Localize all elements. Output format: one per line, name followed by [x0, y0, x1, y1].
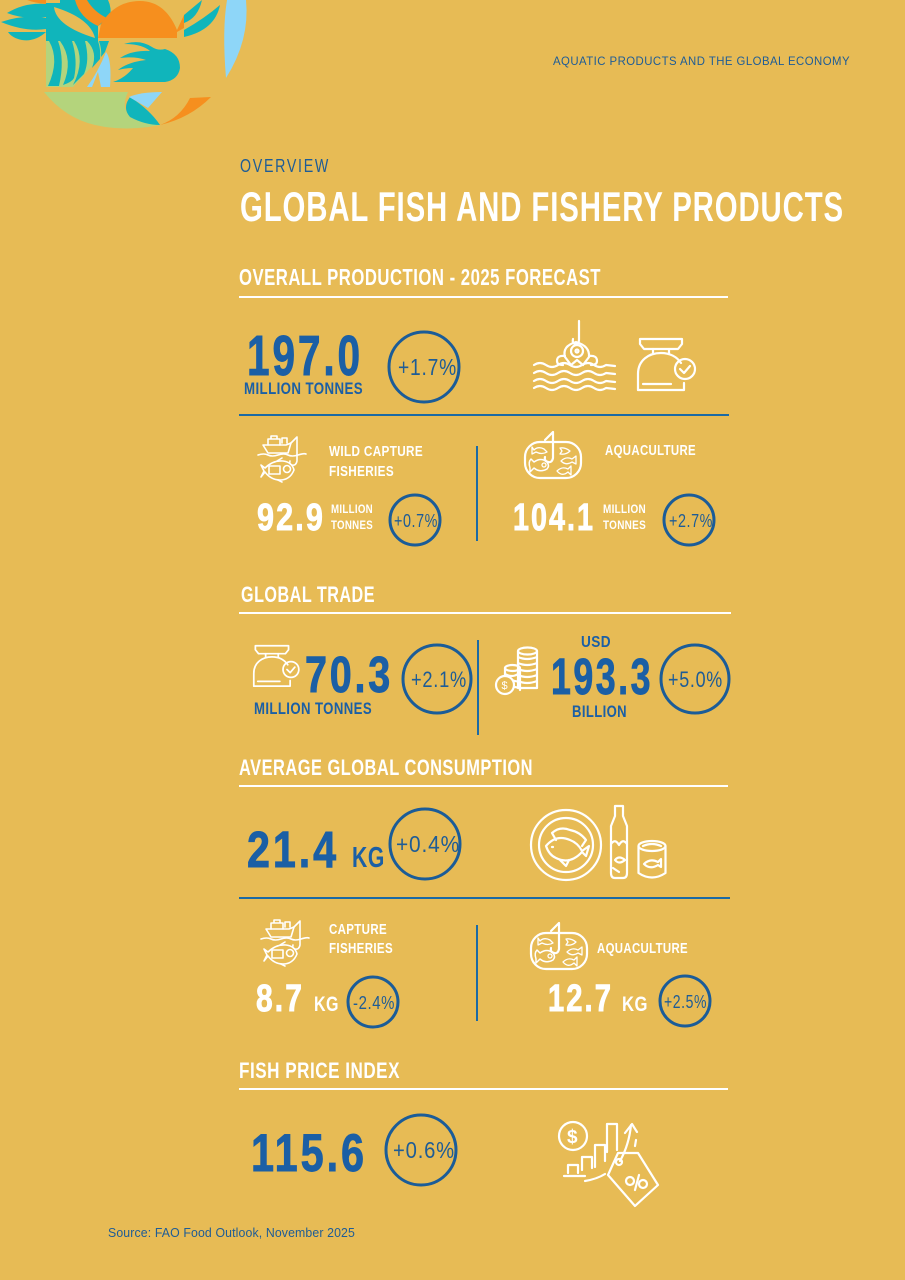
- price index change badge: [386, 1115, 456, 1185]
- icon: tin can: [638, 841, 666, 878]
- wild capture unit: TONNES: [331, 518, 373, 532]
- aquaculture unit: KG: [622, 993, 648, 1016]
- section heading: AVERAGE GLOBAL CONSUMPTION: [239, 755, 533, 780]
- decorative tropical illustration: [1, 0, 247, 128]
- aquaculture change badge: [664, 495, 714, 545]
- aquaculture unit: TONNES: [603, 518, 646, 532]
- aquaculture label: AQUACULTURE: [597, 941, 688, 957]
- price index change badge: +0.6%: [393, 1137, 455, 1163]
- aquaculture unit: MILLION: [603, 502, 646, 516]
- icon: capture fishing boat: [258, 436, 306, 482]
- capture unit: KG: [314, 993, 339, 1016]
- capture value: 8.7: [256, 978, 304, 1020]
- consumption value: 21.4: [247, 821, 339, 878]
- aquaculture value: 12.7: [548, 978, 613, 1020]
- section: fish price index: [239, 1058, 728, 1206]
- wild capture value: 92.9: [257, 497, 325, 539]
- total production figure: 197.0: [247, 324, 363, 388]
- wild capture change badge: +0.7%: [394, 511, 438, 531]
- trade volume value: 70.3: [305, 646, 393, 703]
- panel: production split: [257, 432, 714, 545]
- icon: capture fishing boat: [261, 920, 309, 966]
- icon: coins: $: [502, 680, 508, 692]
- icon: bottle: [611, 806, 627, 878]
- consumption change badge: +0.4%: [396, 831, 460, 857]
- consumption change badge: [390, 809, 460, 879]
- unit: MILLION TONNES: [244, 380, 363, 398]
- icon: aquaculture pond: [525, 432, 581, 478]
- icon: weighing scale: [638, 339, 695, 390]
- section: global trade: [239, 582, 731, 735]
- price index value: 115.6: [251, 1124, 367, 1183]
- icon: aquaculture pond: [531, 923, 587, 969]
- section: average global consumption: [239, 755, 730, 899]
- wild capture unit: [331, 502, 373, 532]
- running header: AQUATIC PRODUCTS AND THE GLOBAL ECONOMY: [553, 54, 850, 68]
- trade value change badge: [661, 645, 729, 713]
- panel: consumption split: [256, 920, 710, 1027]
- capture fisheries label: FISHERIES: [329, 941, 393, 957]
- capture fisheries label: CAPTURE: [329, 922, 387, 938]
- icon: coins: [496, 648, 537, 694]
- wild capture label: [329, 444, 423, 480]
- billion label: BILLION: [572, 702, 627, 721]
- change badge: [389, 332, 459, 402]
- trade volume change badge: +2.1%: [411, 667, 467, 692]
- aquaculture value: 104.1: [513, 497, 595, 539]
- trade value change badge: +5.0%: [668, 667, 723, 692]
- source note: Source: FAO Food Outlook, November 2025: [108, 1226, 355, 1240]
- aquaculture label: AQUACULTURE: [605, 443, 696, 459]
- USD label: USD: [581, 634, 611, 651]
- trade volume change badge: [403, 645, 471, 713]
- trade volume unit: MILLION TONNES: [254, 700, 372, 718]
- aquaculture change badge: [660, 976, 710, 1026]
- wild capture change badge: [390, 495, 440, 545]
- icon: price chart and tag: $: [567, 1127, 578, 1148]
- change badge: +1.7%: [398, 354, 457, 380]
- capture change badge: -2.4%: [353, 993, 395, 1013]
- section: overall production: [239, 264, 729, 416]
- icon: fish on hook over waves: [534, 321, 615, 390]
- icon: fish on plate: [531, 810, 601, 880]
- aquaculture change badge: +2.7%: [669, 511, 713, 531]
- wild capture label: WILD CAPTURE: [329, 444, 423, 460]
- aquaculture unit: [603, 502, 646, 532]
- consumption unit: KG: [352, 842, 385, 874]
- section heading: FISH PRICE INDEX: [239, 1058, 400, 1083]
- icon: scale: [254, 646, 299, 686]
- section heading: OVERALL PRODUCTION - 2025 FORECAST: [239, 264, 601, 290]
- capture fisheries label: [329, 922, 393, 957]
- overview label: OVERVIEW: [240, 156, 330, 176]
- aquaculture change badge: +2.5%: [664, 992, 707, 1012]
- wild capture label: FISHERIES: [329, 464, 394, 480]
- icon: price chart and tag: [559, 1122, 658, 1206]
- section heading: GLOBAL TRADE: [241, 582, 375, 607]
- wild capture unit: MILLION: [331, 502, 373, 516]
- capture change badge: [348, 977, 398, 1027]
- trade value: 193.3: [551, 648, 653, 705]
